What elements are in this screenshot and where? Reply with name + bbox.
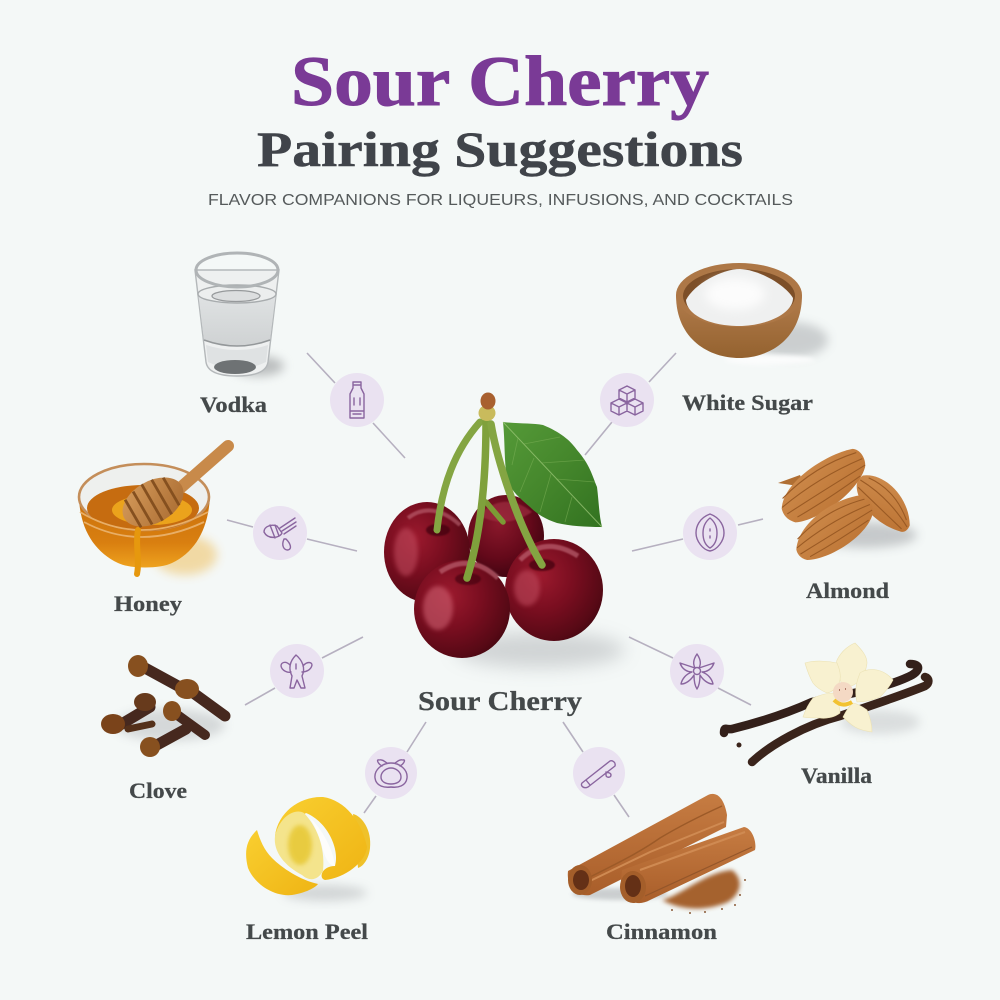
cinnamon stick icon: [573, 747, 625, 799]
vodka group: [195, 253, 384, 427]
cloves: [101, 655, 225, 757]
right cherry: [505, 539, 603, 641]
lemon peel group: [246, 747, 417, 944]
lemon peel: [246, 797, 370, 901]
vodka shot glass: [195, 253, 284, 376]
white sugar group: [600, 263, 828, 427]
almonds: [770, 444, 922, 565]
almond label: Almond: [806, 578, 889, 603]
honey label: Honey: [114, 591, 182, 616]
dipper: [178, 446, 228, 490]
clove label: Clove: [129, 778, 187, 803]
left cherry: [384, 502, 470, 602]
almond icon: [683, 506, 737, 560]
honey bowl with dipper: [79, 446, 228, 575]
vanilla beans and flower: [724, 643, 928, 762]
clove group: [101, 644, 324, 803]
cinnamon sticks and powder: [568, 794, 755, 914]
honey group: [79, 446, 307, 616]
wooden bowl of sugar: [676, 263, 828, 365]
cinnamon label: Cinnamon: [606, 919, 717, 944]
lemon icon: [365, 747, 417, 799]
title: Sour Cherry: [291, 43, 709, 121]
heading: pairing suggestions: Pairing Suggestions: [257, 121, 743, 177]
white sugar label: White Sugar: [682, 390, 813, 415]
almond group: [683, 444, 922, 603]
stems: [437, 422, 542, 578]
flower petals: [803, 643, 893, 732]
star flower icon: [670, 644, 724, 698]
vanilla group: [670, 643, 928, 788]
central cherry cluster: [384, 392, 625, 668]
stem knob: [478, 392, 496, 421]
honey dipper icon: [253, 506, 307, 560]
title: [208, 43, 793, 209]
subtitle: FLAVOR COMPANIONS FOR LIQUEURS, INFUSIONS, AND COCKTAILS: [208, 192, 793, 209]
connector lines: [227, 353, 763, 817]
front cherry: [414, 560, 510, 658]
leaf: [503, 422, 602, 527]
vodka icon: [330, 373, 384, 427]
vanilla label: Vanilla: [801, 763, 872, 788]
sugar cubes icon: [600, 373, 654, 427]
lemon peel label: Lemon Peel: [246, 919, 368, 944]
clove icon: [270, 644, 324, 698]
back cherry: [468, 495, 544, 577]
cinnamon group: [568, 747, 755, 944]
cherry label: Sour Cherry: [418, 686, 583, 716]
vodka label: Vodka: [200, 392, 267, 417]
